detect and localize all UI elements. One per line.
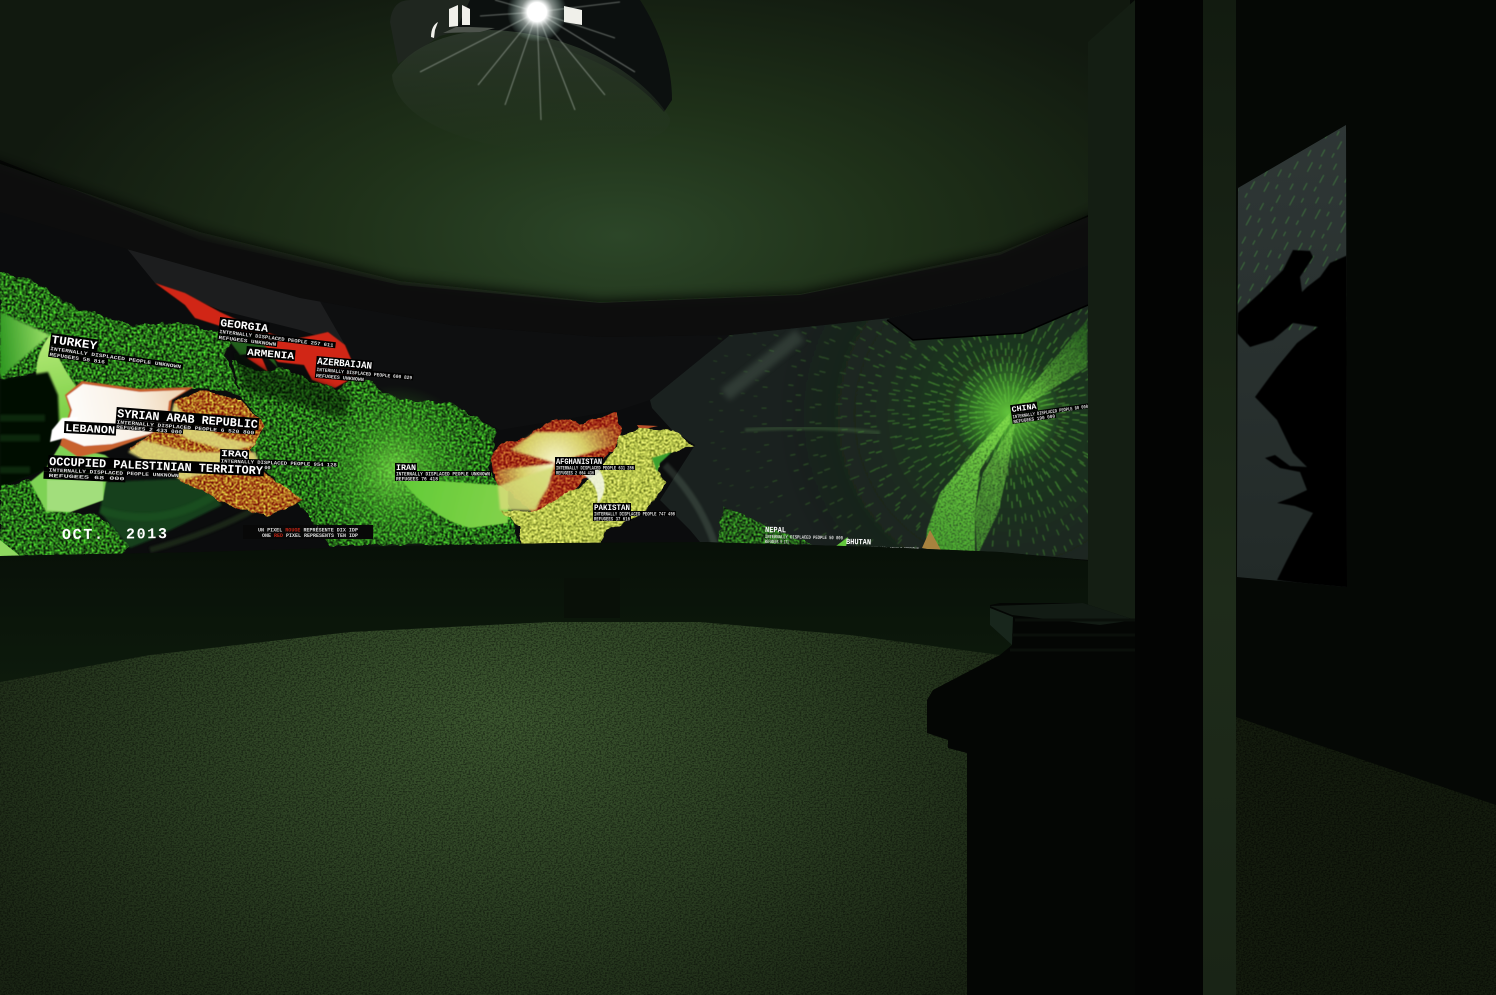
label: Turkey: REFUGEES 58 816 <box>49 352 105 366</box>
armenia <box>225 335 278 368</box>
label: Georgia: REFUGEES UNKNOWN <box>218 335 276 348</box>
ceiling fascia <box>0 150 1130 350</box>
label: Bhutan: BHUTAN <box>846 538 871 547</box>
panel black landmass <box>1237 250 1348 590</box>
ceiling <box>0 0 1130 303</box>
label: Syrian Arab Republic: SYRIAN ARAB REPUBLIC <box>117 407 258 432</box>
projector recess <box>455 0 672 112</box>
faint migration arcs <box>665 335 880 545</box>
russia landmass <box>128 250 344 344</box>
label: China: REFUGEES 190 000 <box>1013 414 1055 425</box>
label: Azerbaijan: AZERBAIJAN <box>317 357 372 373</box>
label: Azerbaijan: INTERNALLY DISPLACED PEOPLE 600 829 <box>316 367 412 381</box>
projector housing <box>390 0 480 64</box>
afghanistan <box>490 412 622 512</box>
label: Iran: INTERNALLY DISPLACED PEOPLE UNKNOWN <box>396 472 490 478</box>
label: Iraq: REFUGEES 248 500 <box>221 463 271 471</box>
turkey left fan <box>0 312 50 378</box>
label: Nepal: INTERNALLY DISPLACED PEOPLE 50 000 <box>765 534 843 541</box>
southern dark arcs <box>0 478 262 556</box>
palestine jordan fan <box>30 445 128 512</box>
central asia ground <box>650 306 1088 560</box>
label: Syrian Arab Republic: REFUGEES 2 433 000 <box>116 424 182 436</box>
lamp glow <box>507 0 567 42</box>
screen base <box>0 250 168 294</box>
label: Iran: IRAN <box>396 464 416 473</box>
projector vents <box>431 5 582 38</box>
right carpet floor <box>1236 717 1496 995</box>
label: Afghanistan: INTERNALLY DISPLACED PEOPLE 631 286 <box>556 466 634 472</box>
china glow core <box>959 362 1058 462</box>
label: Occupied Palestinian Territory <box>43 455 264 488</box>
turkey land <box>0 273 240 395</box>
label: Iran <box>395 463 491 482</box>
label: Georgia: GEORGIA <box>220 318 269 336</box>
label: Occupied Palestinian Territory: OCCUPIED PALESTINIAN TERRITORY <box>49 455 264 478</box>
azerbaijan <box>247 332 358 388</box>
pillar left face <box>1088 0 1135 995</box>
far-east land <box>888 265 1088 340</box>
iraq <box>128 390 303 515</box>
afghan fan <box>497 425 622 512</box>
label: Afghanistan: AFGHANISTAN <box>556 458 602 467</box>
label: Afghanistan <box>555 457 635 476</box>
label: Iraq: INTERNALLY DISPLACED PEOPLE 954 128 <box>221 458 337 469</box>
right projection panel <box>1236 120 1348 590</box>
label: Pakistan: REFUGEES 37 616 <box>594 516 630 522</box>
label: Syrian Arab Republic: INTERNALLY DISPLACED PEOPLE 6 520 800 <box>116 419 254 436</box>
panel green streaks <box>1236 120 1348 330</box>
wainscot below screen <box>0 542 1100 682</box>
lebanon <box>49 416 70 443</box>
china fans <box>926 320 1087 556</box>
bench <box>927 603 1135 995</box>
caspian region <box>320 302 342 340</box>
ceiling projector <box>390 0 672 152</box>
label: Georgia: INTERNALLY DISPLACED PEOPLE 257 611 <box>219 329 334 349</box>
pillar dark face <box>1135 0 1203 995</box>
label: Pakistan: PAKISTAN <box>594 504 630 513</box>
china streak field <box>709 286 1088 559</box>
label: Turkey: TURKEY <box>50 333 99 353</box>
projector bowl <box>392 30 670 152</box>
carpet floor <box>0 622 1000 995</box>
label: Armenia: ARMENIA <box>247 348 294 363</box>
label: Bhutan <box>846 538 919 553</box>
label: China <box>1010 394 1090 426</box>
label: Georgia <box>217 317 336 348</box>
georgia <box>155 282 277 335</box>
iraq yellow fan <box>128 402 262 480</box>
label: Iraq <box>220 449 338 470</box>
pixel legend: ONE RED PIXEL REPRESENTS TEN IDP <box>262 533 358 539</box>
label: China: CHINA <box>1011 403 1037 415</box>
kashmir green <box>652 452 672 472</box>
pixel legend <box>243 525 373 539</box>
label: Iran: REFUGEES 76 418 <box>396 476 438 482</box>
bhutan land <box>836 537 848 547</box>
pillar right face <box>1203 0 1236 995</box>
label: Turkey: INTERNALLY DISPLACED PEOPLE UNKNOWN <box>50 346 181 370</box>
pakistan <box>500 428 693 545</box>
syria <box>60 381 194 457</box>
projection screen map <box>0 250 1088 560</box>
label: Nepal: REFUGEES 9 171 <box>765 539 789 545</box>
label: Azerbaijan: REFUGEES UNKNOWN <box>316 373 364 383</box>
label: Azerbaijan <box>314 356 414 382</box>
label: Occupied Palestinian Territory: REFUGEES 68 000 <box>48 473 125 482</box>
label: Nepal: NEPAL <box>765 526 786 535</box>
label: Occupied Palestinian Territory: INTERNALLY DISPLACED PEOPLE UNKNOWN <box>49 467 179 479</box>
label: China: INTERNALLY DISPLACED PEOPLE 80 000 <box>1012 404 1088 420</box>
light rays <box>420 0 635 120</box>
label: Afghanistan: REFUGEES 2 664 436 <box>556 470 594 476</box>
right wall <box>1235 0 1496 995</box>
label: Turkey <box>48 333 184 370</box>
assam land <box>922 530 940 550</box>
label: Lebanon: LEBANON <box>65 423 115 438</box>
iran fan <box>316 391 509 546</box>
left dark region <box>0 372 60 488</box>
label: Pakistan <box>593 503 676 522</box>
nepal land <box>720 505 812 548</box>
iran land <box>232 360 520 545</box>
wall box <box>564 578 620 618</box>
pakistan white arc <box>582 470 606 503</box>
label: Nepal <box>765 526 843 546</box>
label: Iraq: IRAQ <box>221 449 249 460</box>
pixel legend: UN PIXEL ROUGE REPRÉSENTE DIX IDP <box>258 526 358 534</box>
turkey fan <box>36 335 76 423</box>
label: Bhutan: INTERNALLY DISPLACED PEOPLE UNKNOWN <box>846 545 919 553</box>
date: Oct. 2013: OCT. 2013 <box>62 526 167 544</box>
caucasus shade <box>232 350 350 420</box>
label: Pakistan: INTERNALLY DISPLACED PEOPLE 747 498 <box>594 512 675 518</box>
